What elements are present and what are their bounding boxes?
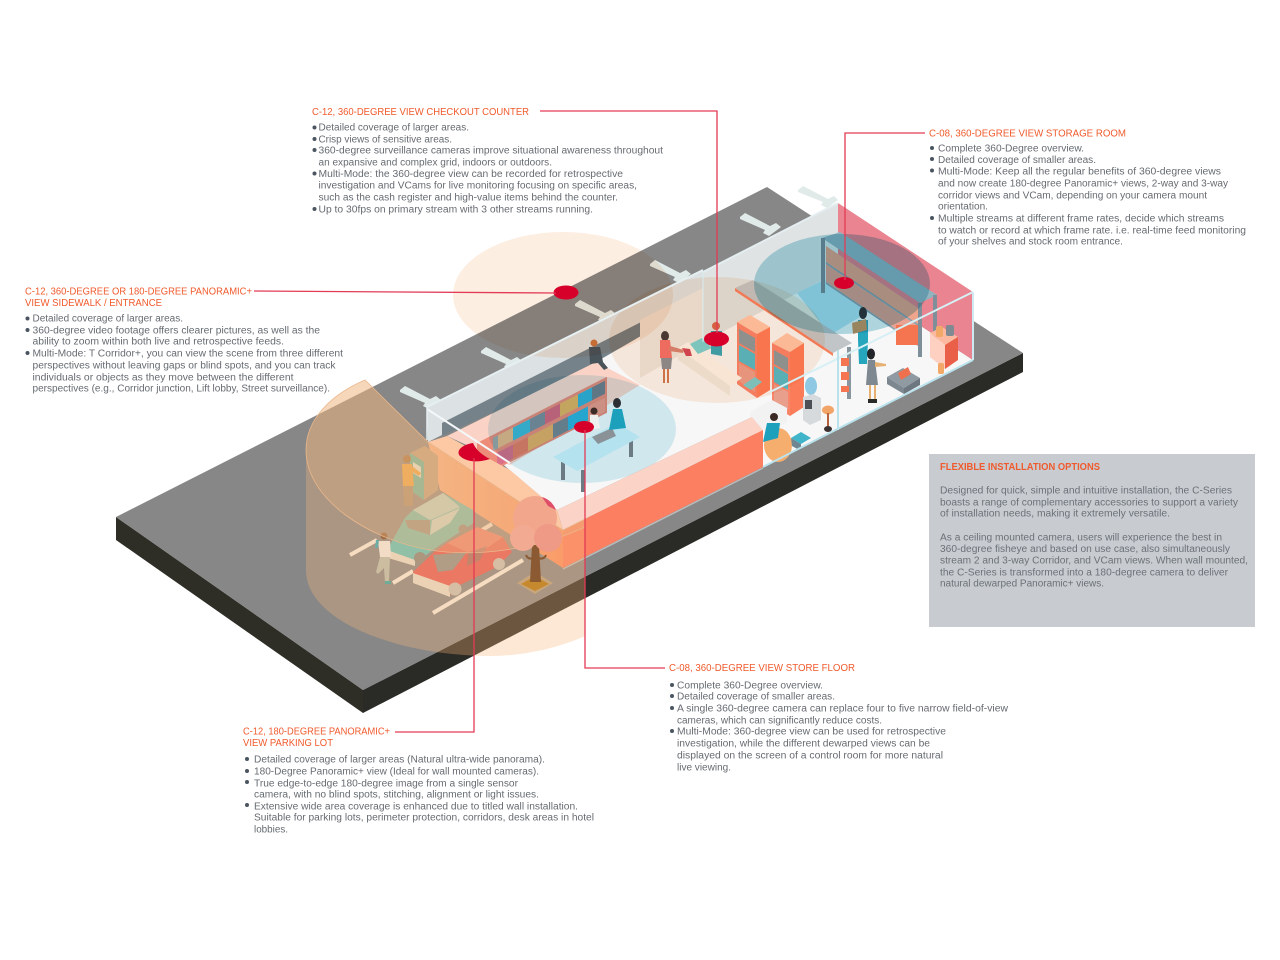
white sofa <box>750 400 787 432</box>
text block: storage room: Detailed coverage of smaller areas. <box>938 155 1096 166</box>
orange bookcases <box>737 315 804 416</box>
text block: store floor: Detailed coverage of smaller areas. <box>677 692 835 702</box>
tree <box>510 496 562 591</box>
text block: checkout counter: Up to 30fps on primary stream with 3 other streams running. <box>318 204 593 216</box>
text block: storage room: of your shelves and stock room entrance. <box>938 236 1123 248</box>
text block: parking lot: camera, with no blind spots, stitching, alignment or light issues. <box>254 790 539 800</box>
text block: sidewalk entrance: ability to zoom within both live and retrospective feeds. <box>32 336 284 348</box>
coverage ellipse: store floor <box>488 375 676 483</box>
ground platform <box>116 187 1023 713</box>
text block: checkout counter: C-12, 360-DEGREE VIEW CHECKOUT COUNTER <box>312 107 529 118</box>
left front wall <box>428 436 563 568</box>
leader line: checkout counter <box>540 111 717 333</box>
text block: sidewalk entrance: 360-degree video footage offers clearer pictures, as well as the <box>32 326 320 336</box>
text block: sidewalk entrance: VIEW SIDEWALK / ENTRANCE <box>25 298 162 309</box>
text block: store floor: live viewing. <box>677 762 731 774</box>
text block: storage room <box>929 128 1246 248</box>
woman customer at counter <box>660 331 684 383</box>
table with laptop <box>553 423 640 492</box>
right front wall <box>557 417 763 569</box>
coverage ellipse: sidewalk entrance <box>453 232 673 358</box>
text block: storage room: orientation. <box>938 202 988 212</box>
panel: flexible installation options <box>929 454 1255 627</box>
stool with plant pot <box>822 406 834 432</box>
checkout counter and till <box>678 338 762 396</box>
glass outlines <box>427 203 973 467</box>
panel: flexible installation options: As a ceiling mounted camera, users will experience the best in <box>940 532 1222 544</box>
woman in grey dress <box>866 348 886 403</box>
text block: parking lot: Detailed coverage of larger areas (Natural ultra-wide panorama). <box>254 754 545 766</box>
text block: sidewalk entrance: individuals or objects as they move between the different <box>32 372 294 384</box>
text block: parking lot: lobbies. <box>254 824 288 836</box>
panel: flexible installation options: Designed for quick, simple and intuitive installation, the C-Series <box>940 486 1232 496</box>
camera: sidewalk <box>554 286 578 300</box>
text block: checkout counter: an expansive and complex grid, indoors or outdoors. <box>318 158 552 168</box>
text block: sidewalk entrance: perspectives (e.g., Corridor junction, Lift lobby, Street surveillance). <box>32 384 330 394</box>
red car <box>413 527 512 597</box>
sitting man near the wall <box>589 340 608 370</box>
sidewalk mounting brackets <box>400 186 838 409</box>
text block: storage room: and now create 180-degree Panoramic+ views, 2-way and 3-way <box>938 178 1228 190</box>
bean bag with seated man <box>763 413 811 462</box>
parking coverage cone body <box>306 380 585 656</box>
woman in teal at table <box>609 398 626 430</box>
cashier behind counter <box>711 322 722 356</box>
text block: sidewalk entrance: Detailed coverage of larger areas. <box>32 314 183 324</box>
leader line: storage room <box>845 133 925 280</box>
storage side wall red <box>838 203 973 360</box>
coverage ellipse: storage room <box>754 234 930 334</box>
panel: flexible installation options: the C-Series is transformed into a 180-degree camera to deliver <box>940 568 1229 578</box>
text block: sidewalk entrance <box>25 286 343 394</box>
panel: flexible installation options: 360-degree fisheye and based on use case, also simultaneously <box>940 544 1230 555</box>
text block: checkout counter: Crisp views of sensitive areas. <box>318 134 452 146</box>
planter <box>517 572 553 594</box>
text block: parking lot: VIEW PARKING LOT <box>243 738 333 749</box>
camera: storage <box>834 277 854 289</box>
text block: parking lot: True edge-to-edge 180-degree image from a single sensor <box>254 778 519 790</box>
text block: checkout counter: Detailed coverage of larger areas. <box>318 122 469 134</box>
text block: parking lot: Suitable for parking lots, perimeter protection, corridors, desk areas in hotel <box>254 812 594 824</box>
camera: checkout <box>704 332 729 346</box>
leader line: store floor <box>585 430 665 668</box>
teal car <box>387 493 475 566</box>
pink floor behind shelf <box>447 362 640 465</box>
text block: checkout counter: such as the cash register and high-value items behind the counter. <box>318 192 618 204</box>
text block: store floor: Multi-Mode: 360-degree view can be used for retrospective <box>677 726 946 738</box>
store floor <box>480 272 973 510</box>
parking bay lines <box>350 524 523 613</box>
panel: flexible installation options: stream 2 and 3-way Corridor, and VCam views. When wall mounted, <box>940 556 1248 566</box>
text block: storage room: Multiple streams at different frame rates, decide which streams <box>938 214 1224 224</box>
text block: checkout counter: Multi-Mode: the 360-degree view can be recorded for retrospective <box>318 169 623 180</box>
text block: storage room: Complete 360-Degree overview. <box>938 144 1084 154</box>
text block: storage room: corridor views and VCam, depending on your camera mount <box>938 190 1207 202</box>
camera: store floor <box>574 421 594 433</box>
water cooler <box>803 377 821 425</box>
leader line: sidewalk <box>254 291 556 293</box>
text block: parking lot <box>243 726 594 836</box>
text block: store floor: cameras, which can significantly reduce costs. <box>677 716 882 726</box>
text block: storage room: to watch or record at which frame rate. i.e. real-time feed monitoring <box>938 226 1246 236</box>
text block: store floor: A single 360-degree camera can replace four to five narrow field-of-view <box>677 704 1009 714</box>
coverage ellipse: checkout counter <box>609 277 825 403</box>
woman carrying a box <box>852 307 868 364</box>
text block: parking lot: 180-Degree Panoramic+ view (Ideal for wall mounted cameras). <box>254 766 539 778</box>
back glass wall <box>427 270 703 442</box>
text block: store floor <box>669 663 1009 774</box>
checkout back wall <box>640 288 703 378</box>
text block: parking lot: Extensive wide area coverage is enhanced due to titled wall installation. <box>254 802 578 812</box>
text block: sidewalk entrance: Multi-Mode: T Corridor+, you can view the scene from three different <box>32 348 343 360</box>
text block: store floor: Complete 360-Degree overview. <box>677 680 823 692</box>
vending machine <box>410 446 438 500</box>
text block: storage room: C-08, 360-DEGREE VIEW STORAGE ROOM <box>929 128 1126 140</box>
text block: store floor: investigation, while the different dewarped views can be <box>677 738 930 750</box>
dresser with vases <box>930 325 958 374</box>
panel: flexible installation options: FLEXIBLE INSTALLATION OPTIONS <box>940 462 1100 473</box>
seated man behind table <box>590 408 600 430</box>
leader line: parking lot <box>395 458 474 732</box>
storage shelf unit <box>821 232 937 357</box>
text block: checkout counter: investigation and VCams for live monitoring focusing on specific areas, <box>318 180 637 192</box>
text block: sidewalk entrance: perspectives without leaving gaps or blind spots, and you can track <box>32 360 337 372</box>
long partition shelf <box>735 280 852 399</box>
man walking in parking lot <box>375 532 391 584</box>
parking coverage cone top <box>306 380 585 553</box>
camera lens: store floor wall dome <box>459 443 490 461</box>
panel: flexible installation options: natural dewarped Panoramic+ views. <box>940 578 1104 590</box>
panel: flexible installation options: boasts a range of complementary accessories to support a variety <box>940 498 1238 508</box>
grey crate with orange box <box>887 367 920 394</box>
text block: checkout counter: 360-degree surveillance cameras improve situational awareness throughout <box>318 146 663 156</box>
text block: store floor: displayed on the screen of a control room for more natural <box>677 750 943 762</box>
text block: sidewalk entrance: C-12, 360-DEGREE OR 180-DEGREE PANORAMIC+ <box>25 286 252 298</box>
man at vending machine <box>402 455 421 506</box>
text block: store floor: C-08, 360-DEGREE VIEW STORE FLOOR <box>669 663 855 674</box>
text block: storage room: Multi-Mode: Keep all the regular benefits of 360-degree views <box>938 166 1221 178</box>
text block: parking lot: C-12, 180-DEGREE PANORAMIC+ <box>243 726 390 738</box>
storage floor cyan <box>797 272 885 335</box>
text block: checkout counter <box>312 107 663 216</box>
panel: flexible installation options: of installation needs, making it extremely versatile. <box>940 508 1170 520</box>
bookshelf with coloured books <box>477 377 607 479</box>
storage back wall <box>703 203 838 342</box>
